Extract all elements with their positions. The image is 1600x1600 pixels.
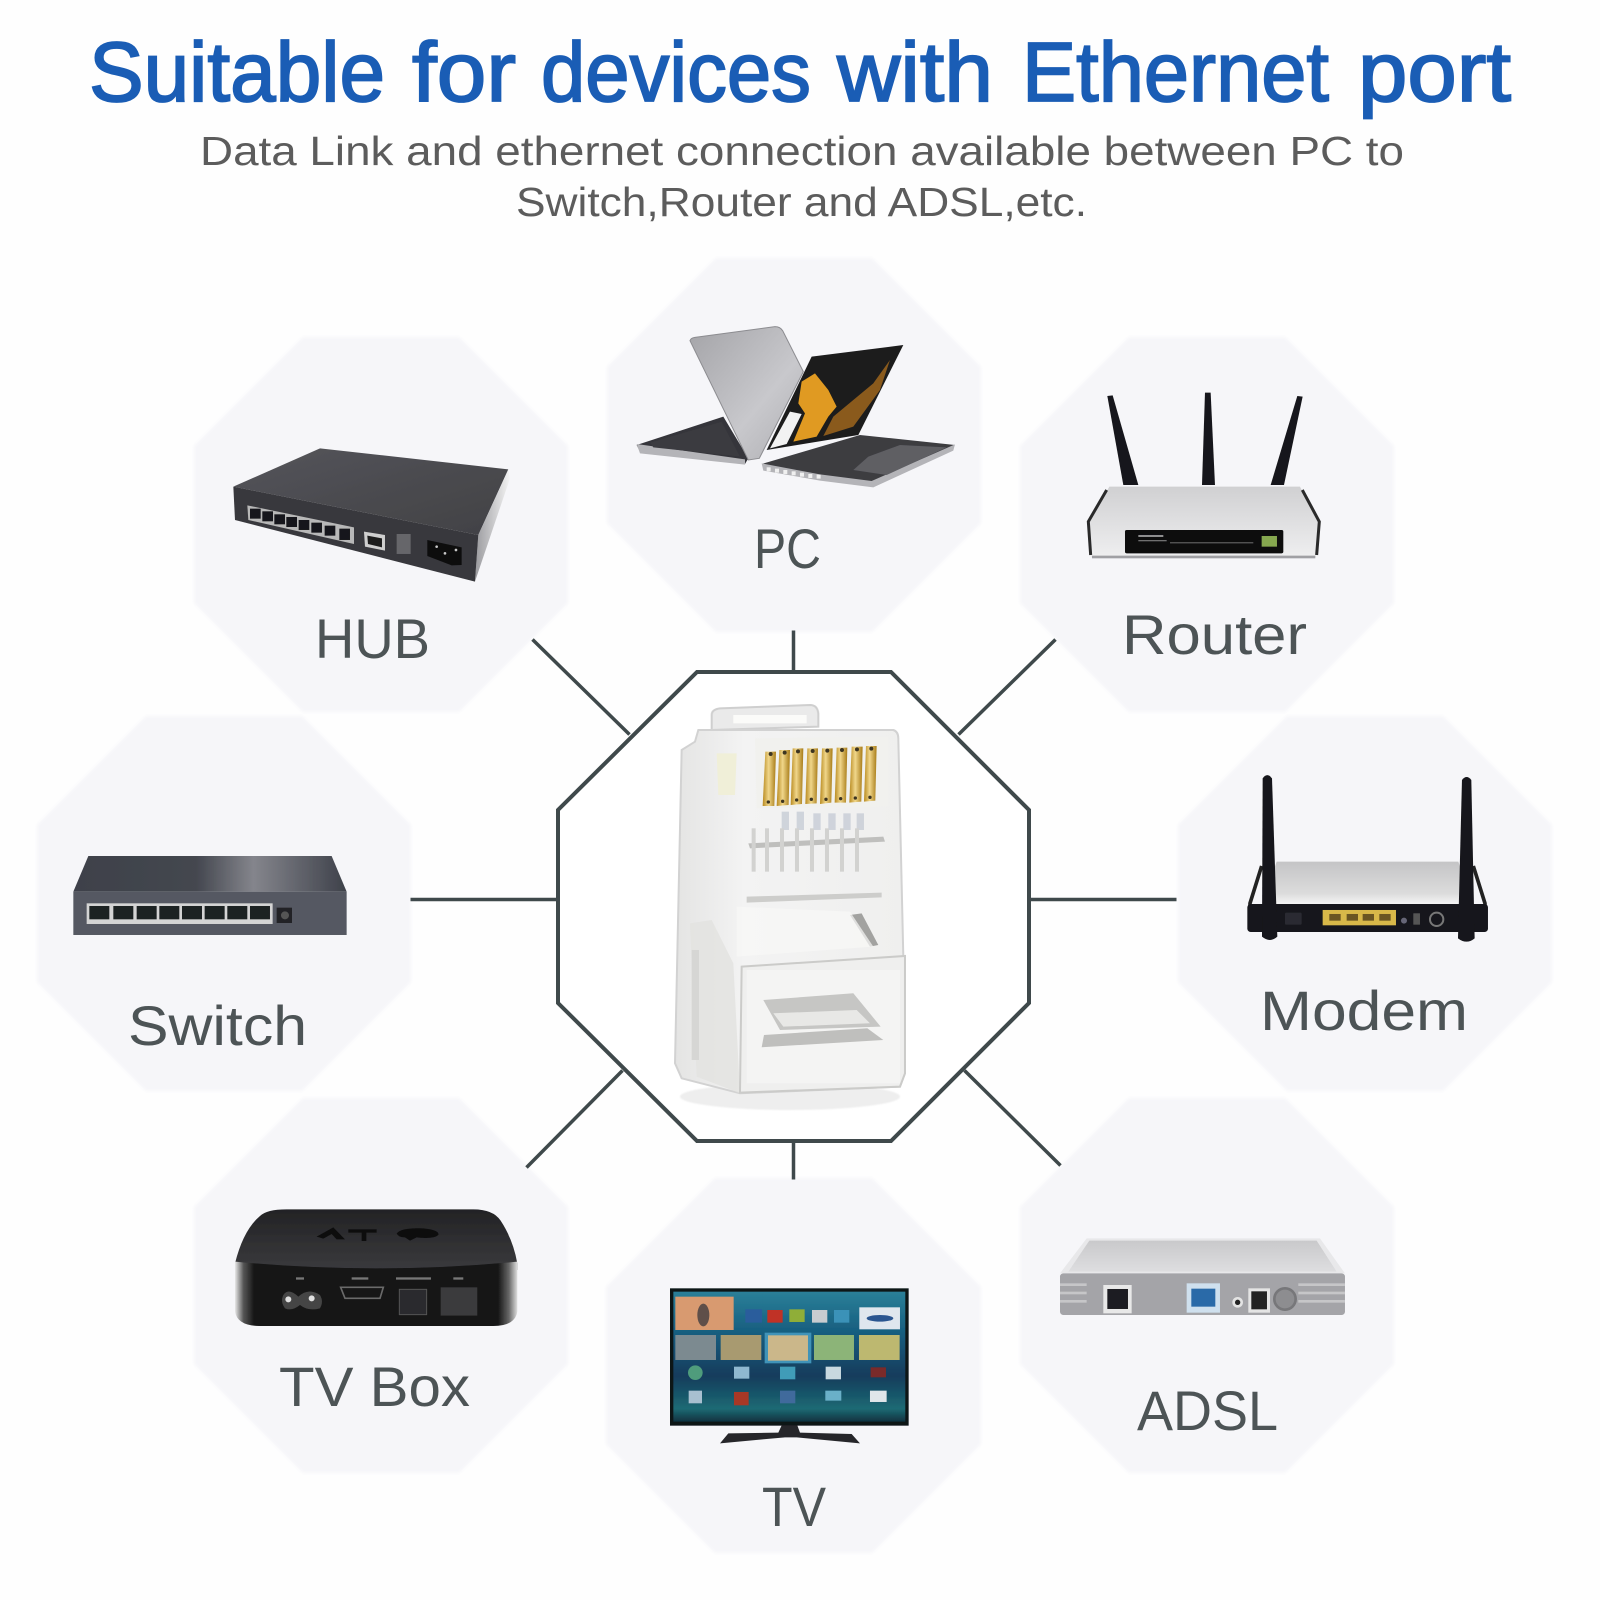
label: PC: PC <box>754 517 821 580</box>
icon: switch <box>73 856 347 935</box>
panel: TV <box>606 1178 981 1553</box>
title: Ethernet <box>1022 25 1329 119</box>
icon: TV <box>670 1288 909 1443</box>
label: HUB: HUB <box>315 607 430 670</box>
title: Suitable <box>89 25 385 119</box>
panel: Router <box>1020 337 1394 712</box>
subtitle: Data Link and ethernet connection available between PC to <box>200 128 1404 174</box>
label: ADSL: ADSL <box>1137 1379 1278 1442</box>
panel: Switch <box>37 716 411 1091</box>
label: Modem: Modem <box>1260 979 1468 1042</box>
title: for <box>412 25 516 119</box>
connector lines <box>410 630 1176 1180</box>
panel: ADSL <box>1020 1098 1394 1473</box>
panel: Modem <box>1178 716 1552 1091</box>
icon: laptops <box>637 327 955 487</box>
icon: hub <box>233 448 510 582</box>
label: TV Box: TV Box <box>279 1355 470 1418</box>
label: Router: Router <box>1122 603 1307 666</box>
icon: ADSL modem <box>1060 1238 1345 1315</box>
label: TV: TV <box>762 1475 827 1538</box>
panel: TV Box <box>194 1098 568 1473</box>
subtitle <box>200 128 1404 225</box>
title: devices <box>541 25 811 119</box>
icon: RJ45 connector <box>675 705 905 1110</box>
icon: modem <box>1247 775 1488 942</box>
panel: PC <box>607 258 981 632</box>
panel: HUB <box>194 337 568 712</box>
title: port <box>1358 25 1511 119</box>
title: with <box>836 25 993 119</box>
icon: TV box <box>235 1209 517 1326</box>
title <box>89 25 1511 119</box>
subtitle: Switch,Router and ADSL,etc. <box>516 179 1087 225</box>
icon: router <box>1088 393 1319 558</box>
label: Switch: Switch <box>128 994 307 1057</box>
central octagon frame <box>558 672 1029 1141</box>
